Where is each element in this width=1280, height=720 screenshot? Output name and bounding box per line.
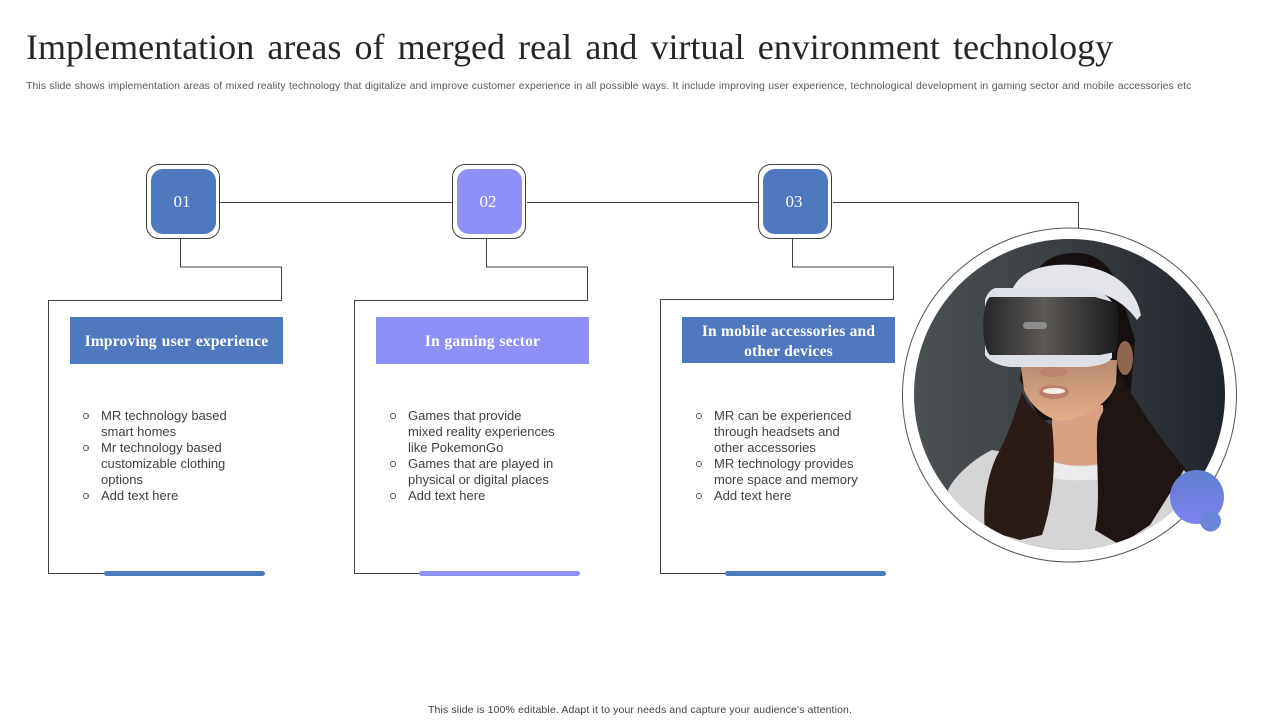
bullet list 2: Games that provide <box>408 408 521 423</box>
small bubble <box>1200 510 1221 532</box>
bullet list 1 <box>83 408 227 503</box>
bullet list 3 <box>696 408 858 503</box>
ear <box>1117 341 1133 375</box>
accent bar 1 <box>104 571 265 576</box>
photo: woman wearing VR headset <box>902 228 1237 562</box>
bullet list 3: more space and memory <box>714 472 858 487</box>
bullet list 3: other accessories <box>714 440 816 455</box>
bullet list 2: Games that are played in <box>408 456 553 471</box>
neck <box>1052 405 1106 466</box>
bullet list 1: MR technology based <box>101 408 227 423</box>
large bubble <box>1170 470 1224 524</box>
number badge 01: 01 <box>174 192 190 211</box>
bullet list 2: mixed reality experiences <box>408 424 555 439</box>
heading: in mobile accessories: In mobile accessories and <box>702 323 875 340</box>
heading: in gaming sector: In gaming sector <box>425 332 540 350</box>
headset band <box>1013 265 1141 320</box>
bullet list 3: through headsets and <box>714 424 840 439</box>
bullet list 1: customizable clothing <box>101 456 225 471</box>
heading: improving user experience: Improving user experience <box>85 332 268 350</box>
heading: improving user experience <box>70 317 283 364</box>
visor shell <box>985 288 1112 367</box>
number badge 03: 03 <box>786 192 802 211</box>
bullet list 1: Add text here <box>101 488 178 503</box>
hair dome behind head <box>1020 253 1135 420</box>
number badge 02 <box>452 164 526 239</box>
shirt <box>948 450 1186 550</box>
long hair right <box>1095 375 1185 545</box>
number badge 01 <box>146 164 220 239</box>
bullet list 3: MR technology provides <box>714 456 853 471</box>
bullet list 2: like PokemonGo <box>408 440 503 455</box>
bullet list 2 <box>390 408 555 503</box>
bullet list 2: physical or digital places <box>408 472 549 487</box>
accent bar 2 <box>419 571 580 576</box>
bullet list 1: Mr technology based <box>101 440 222 455</box>
title: Implementation areas of merged real and virtual environment technology <box>26 27 1113 67</box>
bullet list 1: options <box>101 472 143 487</box>
bullet list 3: MR can be experienced <box>714 408 851 423</box>
heading: in gaming sector <box>376 317 589 364</box>
subtitle: This slide shows implementation areas of mixed reality technology that digitalize and improve customer experience in all possible ways. It include improving user experience, technological development in gaming sector and mobile accessories etc <box>26 80 1191 92</box>
footer note: This slide is 100% editable. Adapt it to your needs and capture your audience's attention. <box>428 704 852 716</box>
bullet list 2: Add text here <box>408 488 485 503</box>
outer ring <box>902 228 1236 562</box>
number badge 03 <box>758 164 832 239</box>
smile <box>1039 385 1069 399</box>
nose shadow <box>1039 367 1067 377</box>
accent bar 3 <box>725 571 886 576</box>
heading: in mobile accessories <box>682 317 895 363</box>
face <box>1020 360 1117 421</box>
bullet list 1: smart homes <box>101 424 176 439</box>
number badge 02: 02 <box>480 192 496 211</box>
bullet list 3: Add text here <box>714 488 791 503</box>
shirt collar <box>1053 462 1098 480</box>
long hair left <box>984 392 1054 540</box>
heading: in mobile accessories: other devices <box>744 343 833 360</box>
